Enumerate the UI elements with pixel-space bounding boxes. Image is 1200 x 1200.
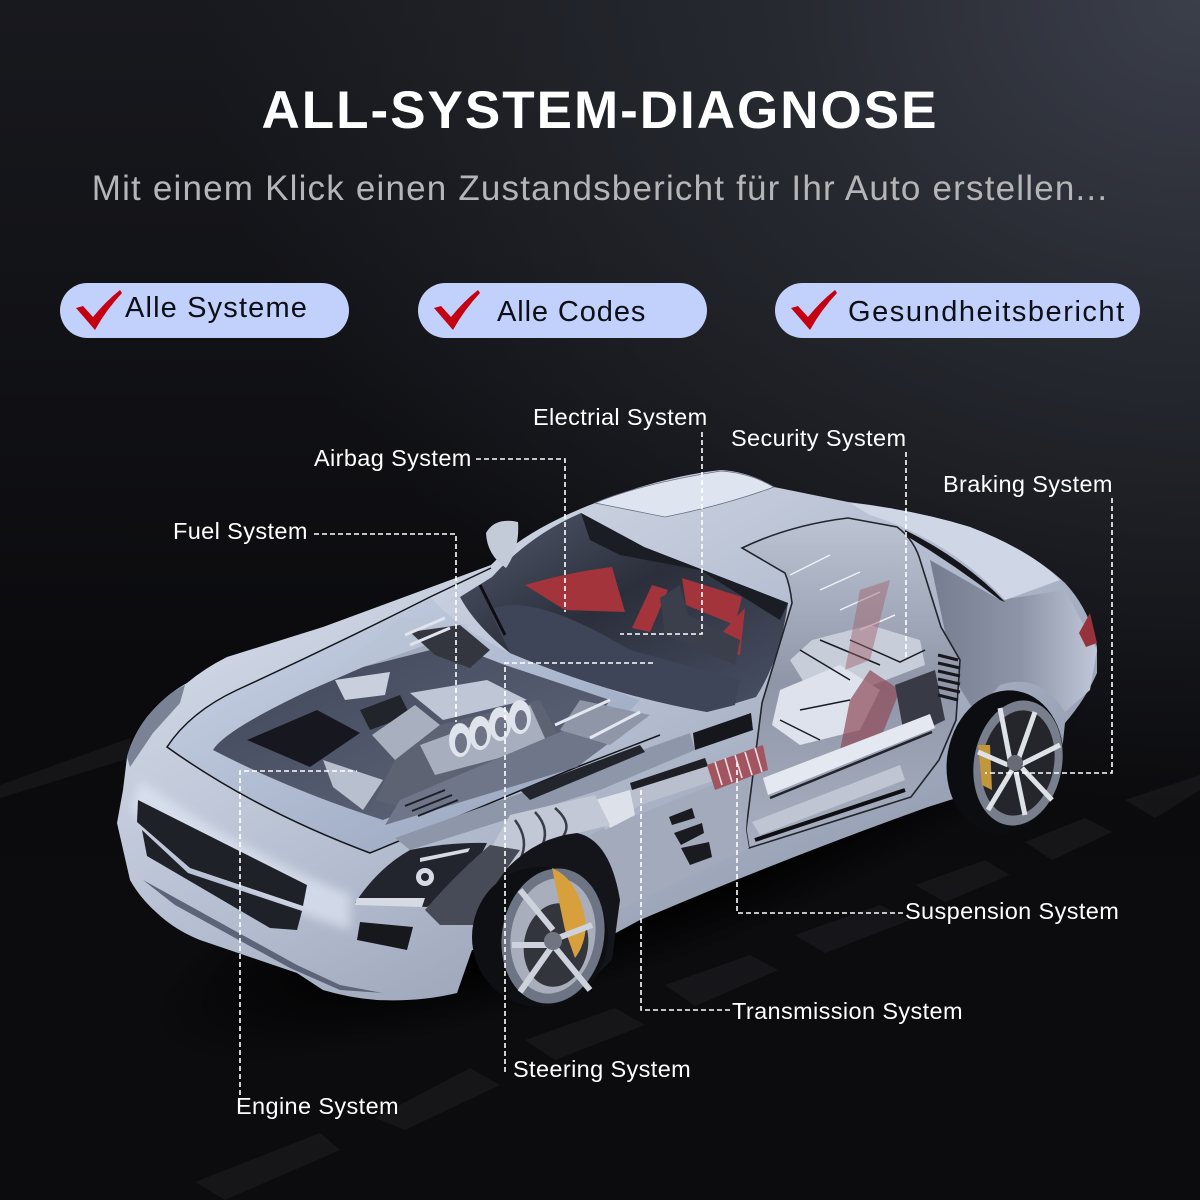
wheel arch	[480, 833, 620, 1000]
transparent hood front	[310, 617, 470, 690]
left headlight	[127, 685, 185, 767]
door lines	[742, 518, 960, 848]
label: Gesundheitsbericht: Gesundheitsbericht	[848, 296, 1126, 328]
coil spring	[938, 655, 960, 700]
label: Alle Systeme: Alle Systeme	[125, 292, 308, 324]
dark pipe tunnel	[693, 713, 753, 750]
engine parts	[247, 618, 650, 825]
label: Braking System: Braking System	[943, 471, 1113, 497]
front wheel	[472, 860, 615, 1012]
label: Transmission System: Transmission System	[732, 998, 963, 1024]
engine bay	[213, 640, 610, 820]
icon: check mark	[791, 290, 837, 330]
bright fender highlight	[130, 780, 350, 930]
rear quarter	[930, 560, 1097, 712]
mirror	[486, 521, 518, 568]
label: Electrial System: Electrial System	[533, 404, 708, 430]
label: Alle Codes: Alle Codes	[497, 296, 646, 328]
title: ALL-SYSTEM-DIAGNOSE	[262, 81, 938, 140]
roof shade in windshield	[581, 513, 788, 620]
label: Fuel System: Fuel System	[173, 518, 308, 544]
dashboard	[490, 605, 740, 712]
icon: check mark	[434, 290, 480, 330]
windshield	[460, 513, 788, 712]
hood outline	[167, 568, 660, 853]
rear mechanics	[772, 555, 945, 750]
badge: Alle Systeme	[60, 283, 349, 338]
grille	[137, 800, 307, 930]
label: Security System: Security System	[731, 425, 906, 451]
shadow	[111, 581, 1129, 1139]
door cutaway	[742, 518, 960, 848]
red coil	[707, 745, 768, 790]
badge: Gesundheitsbericht	[775, 283, 1140, 338]
subtitle: Mit einem Klick einen Zustandsbericht für Ihr Auto erstellen...	[92, 169, 1108, 208]
badge: Alle Codes	[418, 283, 707, 338]
seats	[525, 567, 745, 655]
hood panel	[167, 597, 640, 853]
exhaust pipe	[600, 765, 716, 830]
fender engine gap	[425, 845, 520, 925]
side panel front	[590, 770, 750, 912]
label: Suspension System: Suspension System	[905, 898, 1119, 924]
tail light	[1079, 613, 1097, 647]
right headlight	[355, 843, 487, 907]
sill bars	[752, 714, 935, 840]
deck slit	[905, 530, 1005, 602]
label: Steering System: Steering System	[513, 1056, 691, 1082]
lower lip	[143, 880, 383, 993]
lower intake	[357, 922, 413, 950]
brake caliper	[552, 868, 586, 958]
rear wheel	[935, 681, 1075, 843]
car body	[117, 470, 1097, 1000]
label: Engine System: Engine System	[236, 1093, 399, 1119]
label: Airbag System: Airbag System	[314, 445, 472, 471]
rear deck highlight	[850, 503, 1060, 600]
exhaust manifold	[490, 795, 610, 885]
icon: check mark	[76, 290, 122, 330]
wiper	[480, 585, 505, 635]
roof panel	[595, 471, 774, 517]
door vents	[669, 808, 712, 865]
